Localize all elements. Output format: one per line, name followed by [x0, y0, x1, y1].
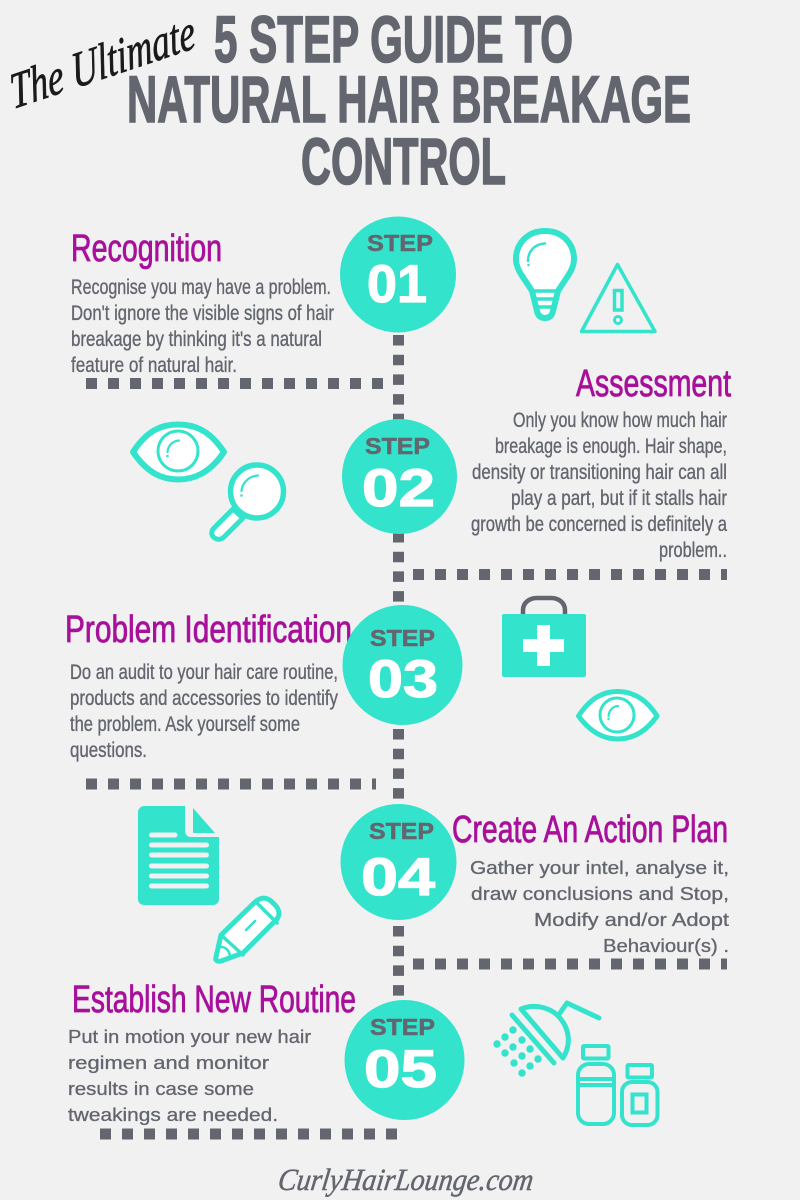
text: assessment body — [471, 409, 727, 562]
text: recognition body: Don't ignore the visible signs of hair — [71, 302, 334, 325]
step badge 01 — [340, 216, 456, 332]
panel: step 5 establish new routine — [68, 979, 658, 1125]
icon: shower head — [493, 1003, 599, 1077]
step badge 03: STEP — [370, 625, 435, 651]
panel: step 1 recognition — [71, 216, 655, 377]
text: action plan body: Modify and/or Adopt — [534, 910, 729, 930]
step badge 03 — [342, 605, 462, 725]
text: new routine body: Put in motion your new hair — [68, 1027, 311, 1047]
step badge 05 — [344, 1000, 464, 1120]
text: assessment body: breakage is enough. Hair shape, — [495, 435, 727, 458]
icon: first aid kit — [502, 598, 586, 677]
text: problem identification body: questions. — [70, 739, 147, 762]
text: recognition body: feature of natural hair. — [71, 354, 237, 377]
text: recognition body — [71, 276, 334, 377]
icon: light bulb — [516, 231, 574, 318]
step badge 05: 05 — [364, 1040, 437, 1099]
text: new routine body: results in case some — [68, 1079, 254, 1099]
text: new routine body: regimen and monitor — [68, 1053, 269, 1073]
text: action plan body — [470, 858, 729, 956]
icon: pencil — [216, 898, 279, 961]
text: action plan body: Behaviour(s) . — [603, 936, 729, 956]
heading: Recognition: Recognition — [71, 228, 222, 270]
icon: large bottle — [578, 1046, 614, 1124]
title — [6, 2, 691, 198]
heading: Assessment: Assessment — [576, 363, 731, 405]
dotted connector lines — [86, 335, 727, 1134]
text: assessment body: density or transitioning hair can all — [472, 461, 727, 484]
title line 1: 5 STEP GUIDE TO — [214, 2, 573, 76]
text: recognition body: Recognise you may have a problem. — [71, 276, 331, 299]
text: assessment body: problem.. — [659, 539, 727, 562]
step badge 02 — [342, 419, 457, 534]
heading: Problem Identification: Problem Identification — [65, 609, 352, 651]
text: assessment body: Only you know how much hair — [513, 409, 727, 432]
panel: step 2 assessment — [133, 363, 731, 562]
step badge 04: STEP — [369, 818, 434, 844]
text: assessment body: growth be concerned is definitely a — [471, 513, 727, 536]
icon: small bottle — [622, 1065, 658, 1125]
icon: warning triangle — [582, 264, 655, 332]
panel: step 3 problem identification — [65, 598, 657, 762]
panel: step 4 create an action plan — [138, 804, 729, 961]
text: problem identification body — [70, 661, 338, 762]
step badge 04 — [340, 804, 456, 920]
step badge 02: STEP — [365, 433, 430, 459]
step badge 01: STEP — [367, 230, 433, 256]
text: recognition body: breakage by thinking it's a natural — [71, 328, 322, 351]
text: new routine body: tweakings are needed. — [68, 1105, 278, 1125]
step badge 04: 04 — [361, 848, 436, 907]
step badge 03: 03 — [368, 650, 438, 709]
text: action plan body: draw conclusions and Stop, — [471, 884, 729, 904]
text: problem identification body: products and accessories to identify — [70, 687, 338, 710]
step badge 02: 02 — [362, 459, 435, 518]
icon: magnifying glass — [212, 465, 284, 539]
text: problem identification body: Do an audit to your hair care routine, — [70, 661, 338, 684]
heading: Establish New Routine: Establish New Routine — [72, 979, 356, 1021]
text: problem identification body: the problem. Ask yourself some — [70, 713, 300, 736]
text: assessment body: play a part, but if it stalls hair — [511, 487, 727, 510]
step badge 01: 01 — [367, 255, 427, 314]
footer website: CurlyHairLounge.com — [276, 1162, 536, 1197]
text: action plan body: Gather your intel, analyse it, — [470, 858, 729, 878]
icon: document — [138, 806, 219, 905]
icon: eye — [133, 424, 224, 480]
icon: eye — [578, 692, 657, 739]
text: new routine body — [68, 1027, 311, 1125]
title line 3: CONTROL — [301, 124, 506, 198]
step badge 05: STEP — [370, 1014, 435, 1040]
